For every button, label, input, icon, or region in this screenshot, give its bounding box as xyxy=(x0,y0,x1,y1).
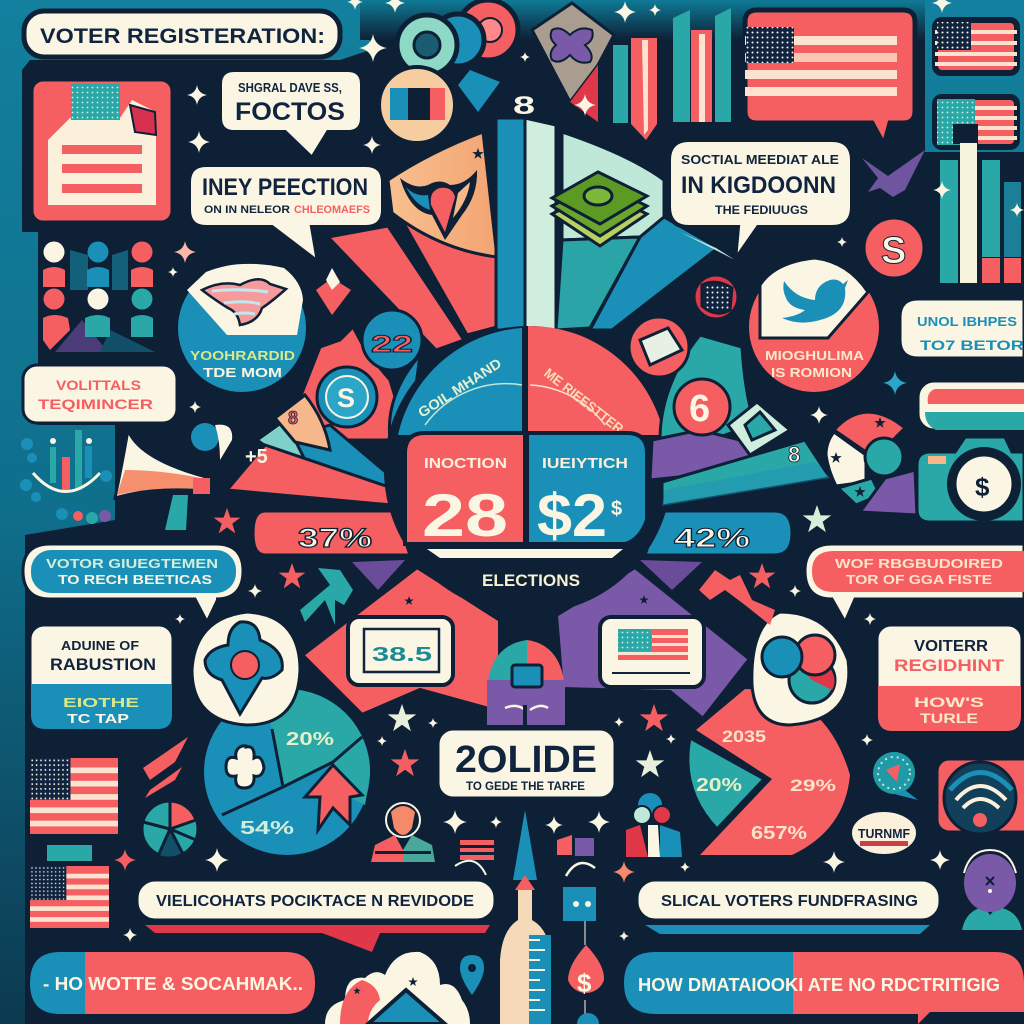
circle: envelope badge xyxy=(176,262,308,394)
icon: location pin xyxy=(460,955,484,995)
callout: focus xyxy=(220,70,362,158)
icon: small pie xyxy=(142,801,198,858)
centre stat: blue box xyxy=(527,433,647,549)
pie chart: left: 54% xyxy=(240,818,294,838)
pill: vielicohats xyxy=(137,880,495,952)
box: headline stat xyxy=(438,729,615,798)
panel: value box: 38.5 xyxy=(372,644,432,666)
icon: purple wings xyxy=(862,150,925,197)
callout: election: CHLEOMAEFS xyxy=(294,204,370,216)
centre stat: coral box: INOCTION xyxy=(424,455,507,472)
label: elections xyxy=(427,549,623,590)
pill: slical voters xyxy=(637,880,940,934)
box: undecided: TO7 BETOR xyxy=(920,337,1024,353)
badge: turnout oval: TURNMF xyxy=(858,826,910,841)
pie chart: left xyxy=(204,689,370,855)
pill: slical voters: SLICAL VOTERS FUNDFRASING xyxy=(661,893,918,910)
icon: ballot box and dollar drop xyxy=(563,887,604,1024)
label: circle numerals: 22 xyxy=(371,331,413,358)
title: VOTER REGISTERATION: xyxy=(40,25,325,48)
icon: presenter xyxy=(371,803,435,862)
centre stat: blue box: $ xyxy=(611,498,622,520)
pill: bottom left xyxy=(30,952,315,1014)
badge: cream balloon xyxy=(192,612,300,725)
pie chart: right: 29% xyxy=(790,776,836,795)
icon: camera: $ xyxy=(975,472,990,502)
callout: election: ON IN NELEOR xyxy=(204,204,290,216)
callout: voter registration fine print: TOR OF GGA FISTE xyxy=(846,572,992,587)
label: circle numerals: 8 xyxy=(288,408,298,428)
box: adune: TC TAP xyxy=(67,711,129,726)
icon: document panel xyxy=(31,79,173,223)
callout: social media xyxy=(669,140,852,260)
teal tab xyxy=(47,845,92,861)
icon: robot figure xyxy=(487,640,565,725)
centre ring and semicircle: GOIL MHAND xyxy=(415,355,504,421)
box: undecided: UNOL IBHPES xyxy=(917,315,1017,329)
flag: lower left xyxy=(30,758,118,834)
icon: camera xyxy=(917,437,1024,522)
icon: ballot box and dollar drop: $ xyxy=(577,968,592,998)
label: number six: 6 xyxy=(689,388,710,430)
bars: top centre xyxy=(613,8,731,140)
circle: envelope badge: YOOHRARDID xyxy=(190,348,295,363)
icon: thermometer xyxy=(500,810,551,1024)
pill: coral and teal xyxy=(918,381,1024,430)
bars: right chart xyxy=(940,143,1021,283)
callout: voter registration fine print: WOF RBGBUDOIRED xyxy=(835,556,1003,571)
icon: money stack xyxy=(552,172,647,246)
centre ring and semicircle xyxy=(384,326,672,614)
box: adune: EIOTHE xyxy=(63,695,139,710)
centre stat: blue box: IUEIYTICH xyxy=(542,455,628,472)
box: voter registration: HOW'S xyxy=(914,695,984,710)
stars xyxy=(214,505,831,777)
icon: dollar coin: S xyxy=(881,230,906,272)
box: voter registration: TURLE xyxy=(920,711,978,726)
flag speech bubble xyxy=(745,10,915,145)
lower fan xyxy=(302,560,750,719)
title xyxy=(24,11,340,57)
centre stat: coral box xyxy=(405,433,525,549)
icon: people grid xyxy=(43,242,155,352)
left fan icons xyxy=(227,310,422,505)
pill: bottom right xyxy=(624,952,1024,1024)
fan segments top xyxy=(328,118,735,350)
pills: percent bars xyxy=(253,511,792,555)
callout: voter engagement xyxy=(23,544,243,622)
twitter badge: IS ROMION xyxy=(771,365,852,380)
box: volunteers: TEQIMINCER xyxy=(38,396,153,412)
callout: focus: SHGRAL DAVE SS, xyxy=(238,81,342,95)
ribbons xyxy=(300,568,775,625)
icon: megaphone xyxy=(115,423,232,530)
pills: percent bars: 42% xyxy=(674,523,750,553)
pie chart: right xyxy=(688,689,850,855)
label: number six: 8 xyxy=(788,442,800,467)
label: circle numerals: S xyxy=(337,383,355,413)
box: voter registration: REGIDHINT xyxy=(894,656,1005,675)
icon: dollar coin xyxy=(864,218,924,278)
icon: cloud xyxy=(325,952,470,1024)
pill: bottom left: - HO WOTTE & SOCAHMAK.. xyxy=(43,974,303,994)
icon: coral diamond xyxy=(316,268,351,315)
icon: bird xyxy=(782,280,848,323)
box: volunteers xyxy=(23,365,177,423)
label: 8 badge: 8 xyxy=(513,92,535,120)
pill: vielicohats: VIELICOHATS POCIKTACE N REVIDODE xyxy=(156,893,474,910)
pills: percent bars: 37% xyxy=(298,523,372,553)
callout: election xyxy=(189,165,383,262)
centre stat: blue box: $2 xyxy=(537,482,607,549)
label: number six xyxy=(689,388,800,467)
callout: election: INEY PEECTION xyxy=(202,174,368,201)
twitter badge xyxy=(747,258,881,394)
badge: venn circles xyxy=(752,612,849,725)
callout: social media: SOCTIAL MEEDIAT ALE xyxy=(681,152,839,167)
top discs xyxy=(379,0,518,143)
box: headline stat: 2OLIDE xyxy=(455,739,597,781)
box: voter registration: VOITERR xyxy=(914,638,988,655)
icon: speech dot bubble xyxy=(873,752,918,800)
box: volunteers: VOLITTALS xyxy=(56,377,141,393)
label: circle numerals: +5 xyxy=(245,446,268,468)
pie: star wheel xyxy=(826,412,917,515)
icon: diamond with purple cross xyxy=(532,3,614,122)
box: headline stat: TO GEDE THE TARFE xyxy=(466,779,585,793)
pie chart: right: 657% xyxy=(751,823,807,843)
box: adune: ADUINE OF xyxy=(61,639,139,653)
panel: value box xyxy=(348,617,453,685)
icon: coral ribbons xyxy=(143,737,188,798)
box: adune xyxy=(30,625,173,730)
callout: voter engagement: VOTOR GIUEGTEMEN xyxy=(46,556,218,571)
box: voter registration xyxy=(877,625,1022,732)
centre stat: coral box: 28 xyxy=(422,482,508,549)
badge: turnout oval xyxy=(851,811,917,855)
callout: social media: IN KIGDOONN xyxy=(681,172,836,199)
icon: group of people xyxy=(626,793,682,857)
twitter badge: MIOGHULIMA xyxy=(765,349,864,363)
panel: flag card xyxy=(600,617,704,687)
centre ring and semicircle: ME RIEESTTER xyxy=(541,365,627,436)
label: circle numerals xyxy=(245,331,413,468)
flag: bottom left xyxy=(30,866,109,928)
label: elections: ELECTIONS xyxy=(482,571,580,590)
flags: top right xyxy=(935,20,1017,147)
callout: voter registration fine print xyxy=(805,544,1024,622)
circle: envelope badge: TDE MOM xyxy=(203,365,282,380)
box: adune: RABUSTION xyxy=(50,655,156,674)
icon: plus xyxy=(226,746,264,788)
pie chart: right: 20% xyxy=(696,775,742,795)
callout: voter engagement: TO RECH BEETICAS xyxy=(58,572,212,587)
icon: small flag left xyxy=(455,840,494,875)
pie chart: left: 20% xyxy=(286,729,334,749)
icon: small flag right xyxy=(557,835,595,876)
icon: heart emblem on peach wedge xyxy=(400,148,484,240)
chart: left bead chart xyxy=(20,430,112,524)
callout: social media: THE FEDIUUGS xyxy=(715,205,808,217)
arrow: up xyxy=(305,765,362,830)
pill: bottom right: HOW DMATAIOOKI ATE NO RDCTRITIGIG xyxy=(638,975,1000,995)
pie chart: right: 2035 xyxy=(722,727,766,746)
icon: purple person xyxy=(962,850,1022,930)
right fan icons xyxy=(629,275,830,506)
callout: focus: FOCTOS xyxy=(235,98,345,126)
icon: wifi xyxy=(937,759,1024,834)
box: undecided xyxy=(900,299,1024,358)
